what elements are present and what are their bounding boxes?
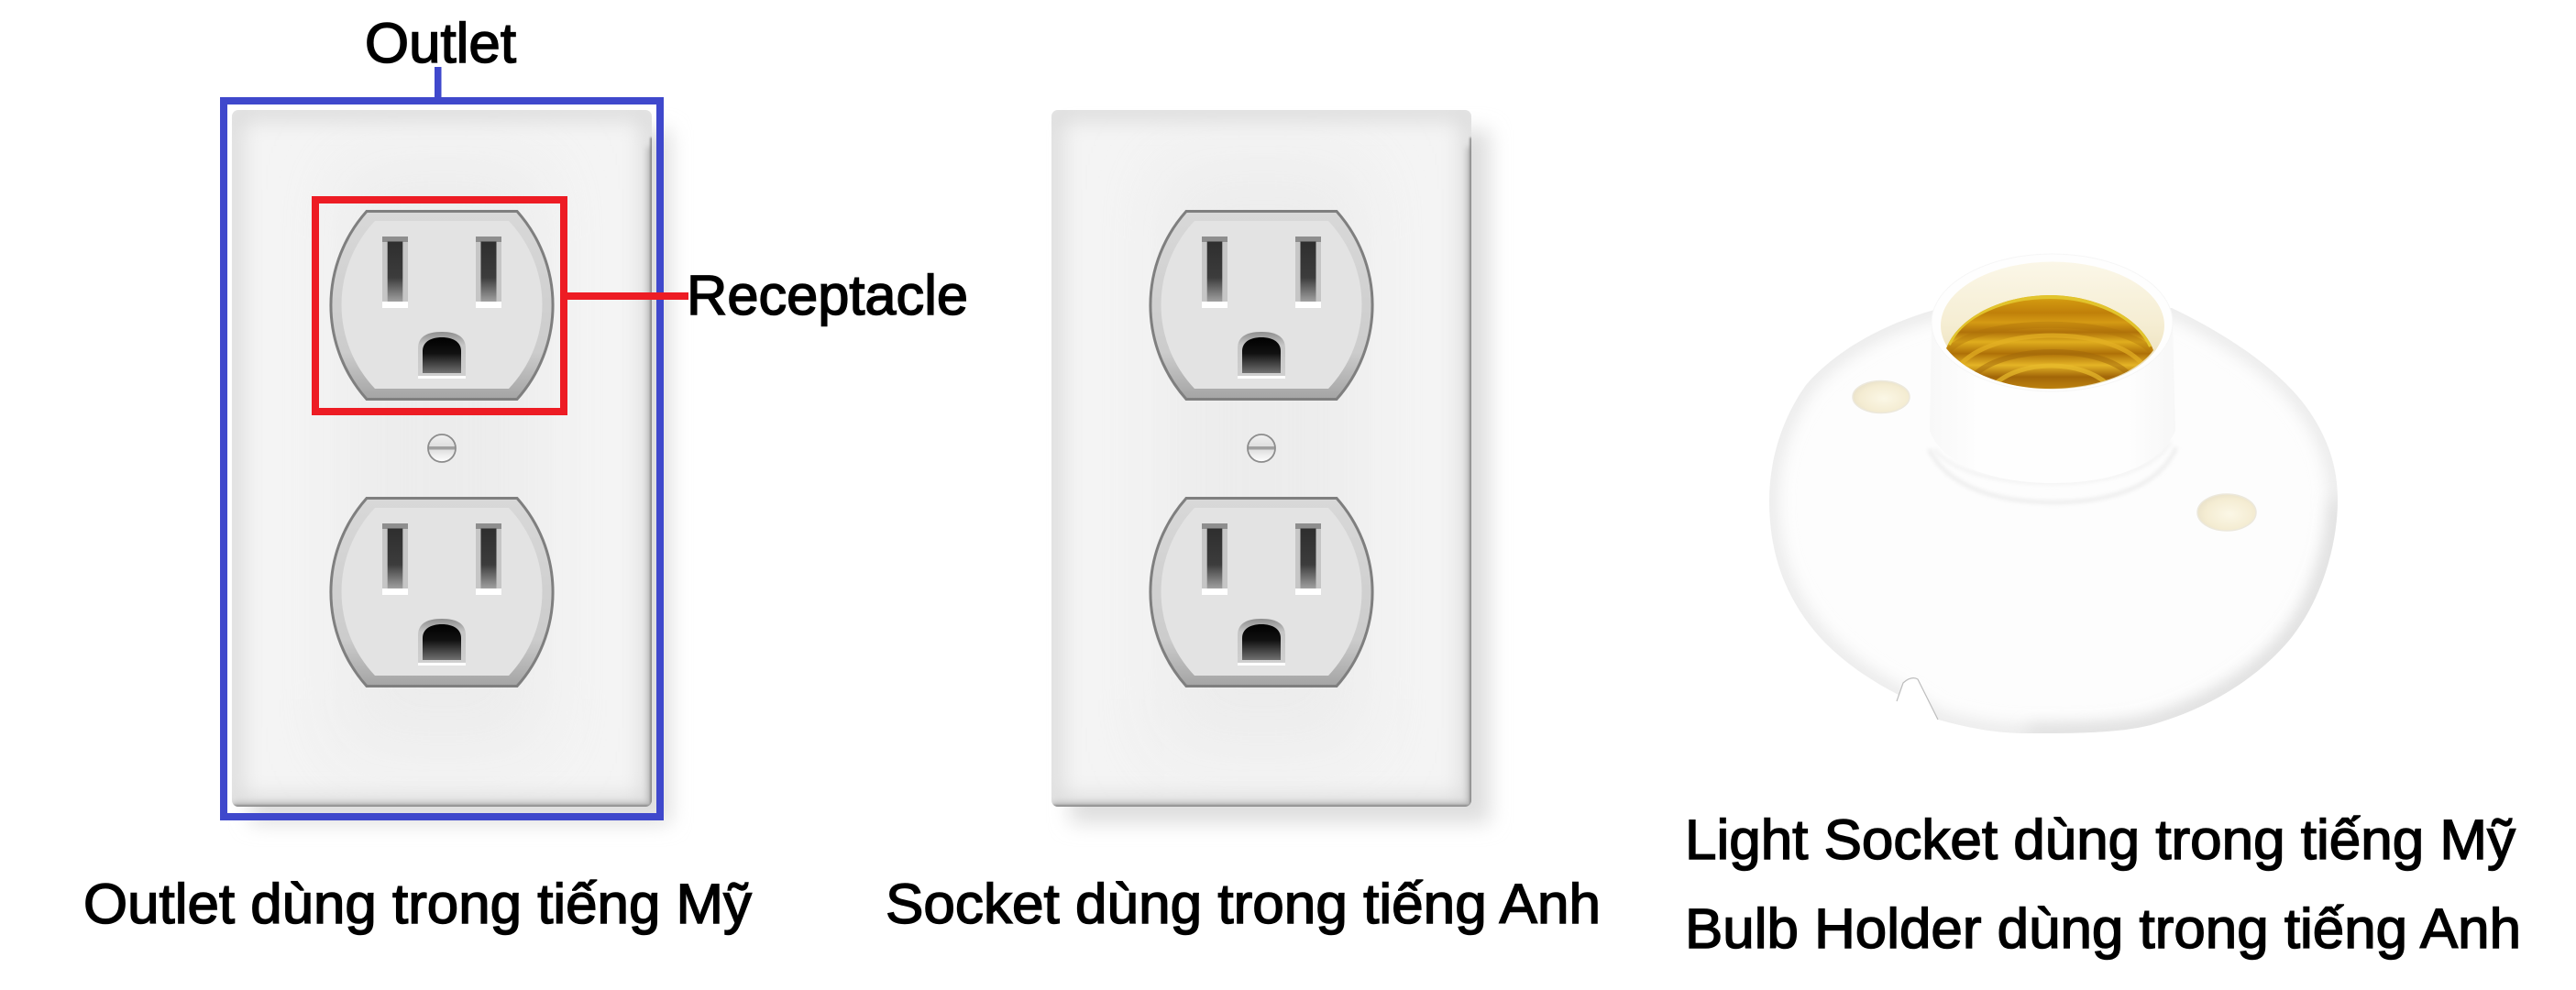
screw: middle plate: [1248, 434, 1275, 462]
inner opening: [1941, 262, 2164, 389]
panel: outlet plate with labels (American English): [83, 12, 968, 936]
label: Receptacle: Receptacle: [687, 264, 968, 326]
icon: round white bulb holder: [1769, 254, 2338, 733]
blue box: outlet outline: [224, 101, 660, 817]
label: Outlet: Outlet: [365, 12, 516, 74]
mounting hole: right: [2197, 494, 2256, 531]
cylindrical neck: [1930, 323, 2175, 483]
caption: Socket: Socket dùng trong tiếng Anh: [886, 873, 1601, 936]
wall plate: middle: [1051, 110, 1490, 823]
notch in base rim: [1897, 678, 1938, 720]
screw: left plate: [428, 434, 456, 462]
panel: socket plate (British English): [886, 110, 1601, 936]
brass screw thread: [1943, 293, 2156, 390]
receptacle: upper left: [331, 211, 553, 400]
holder base: [1769, 308, 2338, 733]
blue connector line: [435, 67, 442, 98]
mounting hole: left: [1853, 381, 1910, 412]
neck top rim: [1932, 254, 2173, 391]
caption: Light Socket: Light Socket dùng trong tiếng Mỹ: [1685, 808, 2515, 872]
caption: Bulb Holder: Bulb Holder dùng trong tiếng Anh: [1685, 897, 2521, 961]
receptacle: upper middle: [1150, 211, 1372, 400]
receptacle: lower left: [331, 499, 553, 686]
wall plate: left: [232, 110, 670, 823]
receptacle: lower middle: [1150, 499, 1372, 686]
red connector line: [567, 292, 688, 300]
caption: Outlet: Outlet dùng trong tiếng Mỹ: [83, 873, 752, 936]
red box: receptacle outline: [315, 200, 564, 412]
collar ridges: [1929, 442, 2176, 502]
panel: light socket / bulb holder: [1685, 254, 2521, 961]
